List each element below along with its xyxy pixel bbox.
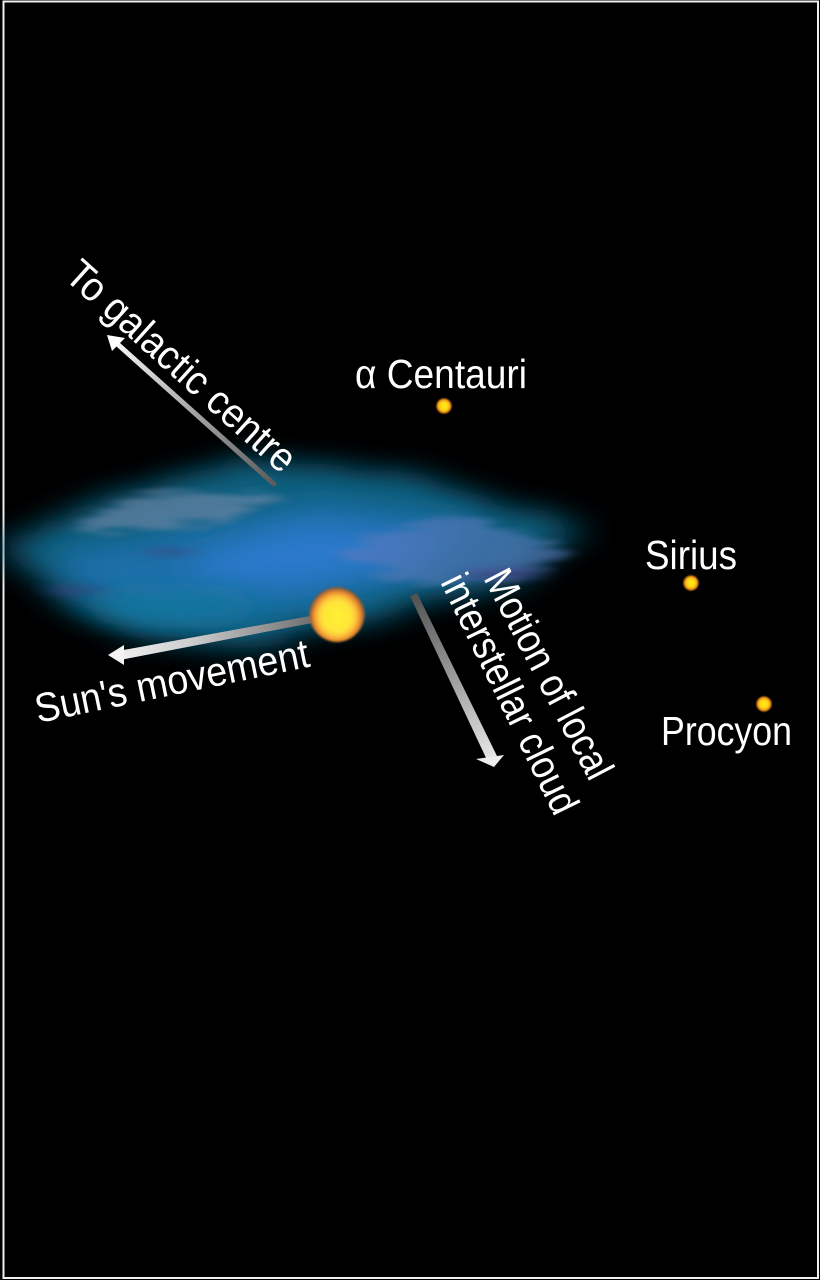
label: interstellar cloud: interstellar cloud: [432, 566, 588, 821]
label: motion of local: Motion of local: [475, 561, 623, 787]
label: Procyon: Procyon: [661, 708, 792, 754]
local interstellar cloud: [0, 462, 585, 648]
label: Sirius: Sirius: [645, 532, 737, 578]
arrow: sun's movement: [108, 616, 312, 665]
blue-violet wisp: right: [335, 515, 570, 582]
arrow: motion of local interstellar cloud: [410, 593, 504, 767]
violet fringe: lower right: [463, 568, 547, 580]
label: alpha Centauri: α Centauri: [355, 351, 527, 397]
label: to galactic centre: To galactic centre: [57, 251, 306, 481]
star: Sirius: [682, 574, 700, 592]
sun: [309, 584, 365, 642]
label: sun's movement: Sun's movement: [30, 630, 314, 732]
star: Procyon: [755, 695, 773, 713]
dark violet patch: [144, 548, 196, 556]
star: alpha Centauri: [435, 397, 453, 415]
violet fringe: left: [43, 584, 107, 596]
arrow: to galactic centre: [107, 335, 274, 484]
grey wisp: left: [75, 490, 285, 530]
